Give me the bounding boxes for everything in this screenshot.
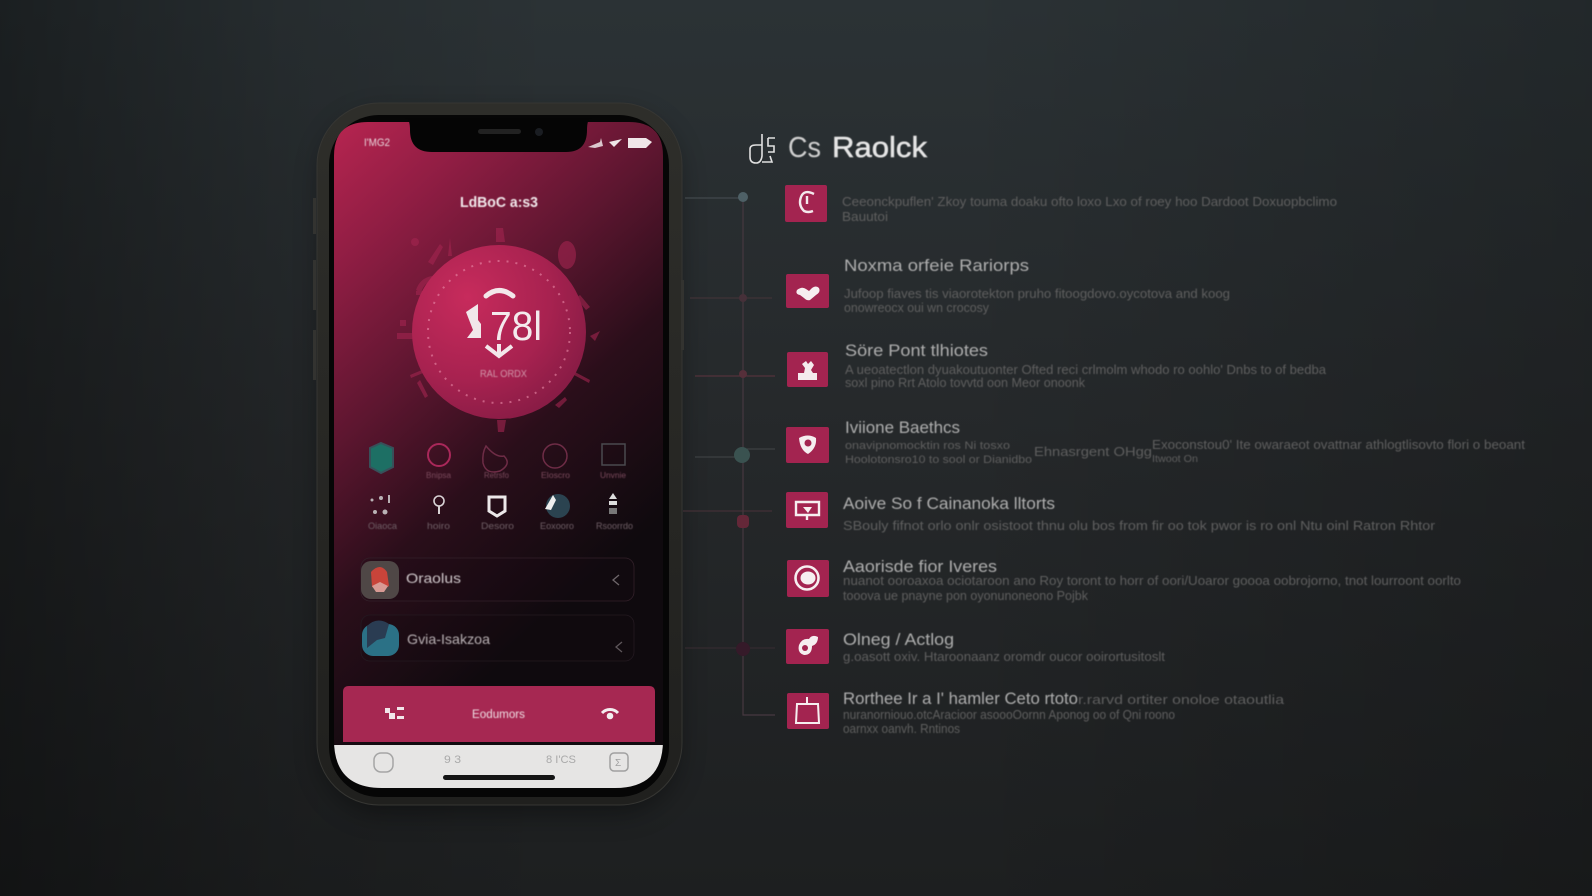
body text 2: Jufoop fiaves tis viaorotekton pruho fitoogdovo.oycotova and koog [844,287,1230,301]
icon tile 7 [786,629,829,664]
icon tile 6 [787,560,829,597]
gauge top arc [486,290,513,296]
icon row two [370,493,617,518]
feature row 3 [787,341,1326,390]
feature row 7 [786,629,1166,664]
body text 8: oarnxx oanvh. Rntinos [843,722,960,736]
title text [788,132,928,164]
bottom pink bar [343,686,655,742]
gauge [397,228,600,432]
heading 8: Rorthee Ir a I' hamler Ceto rtoto [843,689,1078,708]
phone bezel [329,115,669,797]
speaker [478,129,521,134]
body text 4: Ehnasrgent OHgg [1034,445,1152,459]
home indicator [443,775,555,780]
row two labels: Rsoorrdo [596,521,633,531]
icon row one [370,443,625,473]
body text 8: nuranorniouo.otcAracioor asoooOornn Aponog oo of Qni roono [843,708,1175,722]
heading 5: Aoive So f Cainanoka lltorts [843,494,1055,513]
app icon grid [368,443,633,531]
status icons [588,138,652,148]
row one labels [426,471,627,480]
white bottom nav [334,745,663,790]
row one labels: Bnipsa [426,471,452,480]
row two labels [368,521,633,531]
card one chevron [613,575,619,585]
icon tile 3 [787,352,828,387]
phone shadow [322,115,678,813]
heading 8: r.rarvd ortiter onoloe otaoutlia [1078,693,1284,707]
icon tile 2 [786,274,829,308]
feature row 2 [786,256,1230,315]
card two chevron [616,642,622,652]
body text 5: SBouly fifnot orlo onlr osistoot thnu olu bos from fir oo tok pwor is ro onl Ntu oinl Ratron Rhtor [843,519,1435,533]
body text 2: onowreocx oui wn crocosy [844,301,990,315]
phone mockup [313,103,684,813]
avatar one [361,561,399,599]
body text 6: nuanot ooroaxoa ociotaroon ano Roy toront to horr of oori/Uoaror goooa oobrojorno, tnot lourroont oorlto [843,574,1461,588]
title text: Cs [788,132,821,164]
heading 6: Aaorisde fior Iveres [843,557,997,576]
card one label: Oraolus [406,570,461,586]
row one labels: Unvnie [600,471,627,480]
heading 3: Söre Pont tlhiotes [845,341,988,360]
body text 7: g.oasott oxiv. Htaroonaanz oromdr oucor ooirortusitoslt [843,650,1166,664]
nav square icon: Σ [615,758,621,769]
row two labels: Eoxooro [540,521,574,531]
body text 1: Ceeonckpuflen' Zkoy touma doaku ofto loxo Lxo of roey hoo Dardoot Doxuopbclimo [842,195,1337,209]
feature row 8 [787,689,1284,736]
body text 4: onavipnomocktin ros Ni tosxo [845,440,1010,452]
nav label one: 9 3 [444,754,461,766]
bar wifi icon [602,710,618,718]
notch [405,118,592,152]
side buttons [313,198,684,380]
bar left icon [385,707,404,719]
row two labels: Oiaoca [368,521,397,531]
title icon [750,134,775,163]
body text 3 [845,363,1326,390]
body text 6: tooova ue pnayne pon oyonunoneono Pojbk [843,589,1089,603]
dotted ring [428,261,570,403]
icon tile 8 [787,693,829,729]
title text: Raolck [832,132,928,164]
icon tile 1 [785,185,827,222]
body text 3: soxl pino Rrt Atolo tovvtd oon Meor onoonk [845,376,1086,390]
avatar two [362,620,399,656]
camera [535,128,543,136]
icon tile 4 [786,427,829,463]
feature row 5 [786,492,1435,533]
feature row 6 [787,557,1461,603]
list card one [361,558,634,601]
card two label: Gvia-Isakzoa [407,631,490,647]
phone screen [334,122,663,790]
nav chat icon [374,753,393,772]
icon tile 5 [786,492,828,528]
title block [750,132,928,164]
list card two [361,615,634,661]
heading 8 [843,689,1284,708]
body text 4: Itwoot On [1152,453,1198,465]
heading 2: Noxma orfeie Rariorps [844,256,1029,275]
body text 4 [845,438,1526,466]
row one labels: Retrsfo [484,471,510,480]
body text 4: Hoolotonsro10 to sool or Dianidbo [845,454,1032,466]
body text 1: Bauutoi [842,210,888,224]
screen heading: LdBoC a:s3 [460,195,538,211]
heading 7: Olneg / Actlog [843,630,954,649]
nav label two: 8 I'CS [546,754,576,766]
row one labels: Eloscro [541,471,571,480]
gauge left glyph [466,304,481,338]
feature row 1 [785,185,1337,224]
feature row 4 [786,418,1526,466]
connector timeline [683,192,775,715]
bar label: Eodumors [472,709,525,721]
nav square icon [610,753,628,771]
timeline nodes [734,192,750,656]
row two labels: hoiro [427,521,450,531]
screen gradient [334,122,663,788]
body text 3: A ueoatectlon dyuakoutuonter Ofted reci crlmolm whodo ro oohlo' Dnbs to of bedba [845,363,1326,377]
row two labels: Desoro [481,521,514,531]
phone frame [317,103,682,805]
gauge label: RAL ORDX [480,369,527,380]
body text 2 [844,287,1230,315]
vertical spine [743,197,775,715]
gauge decorations [397,228,600,432]
heading 4: Iviione Baethcs [845,418,960,437]
gauge disc [412,245,586,419]
body text 6 [843,574,1461,603]
body text 1 [842,195,1337,224]
gauge value: 78l [490,303,542,349]
body text 8 [843,708,1175,736]
gauge down arrow [486,344,512,356]
branch lines [683,198,775,648]
body text 4: Exoconstou0' Ite owaraeot ovattnar athlogtlisovto flori o beoant [1152,438,1526,452]
status time: I'MG2 [364,137,390,149]
